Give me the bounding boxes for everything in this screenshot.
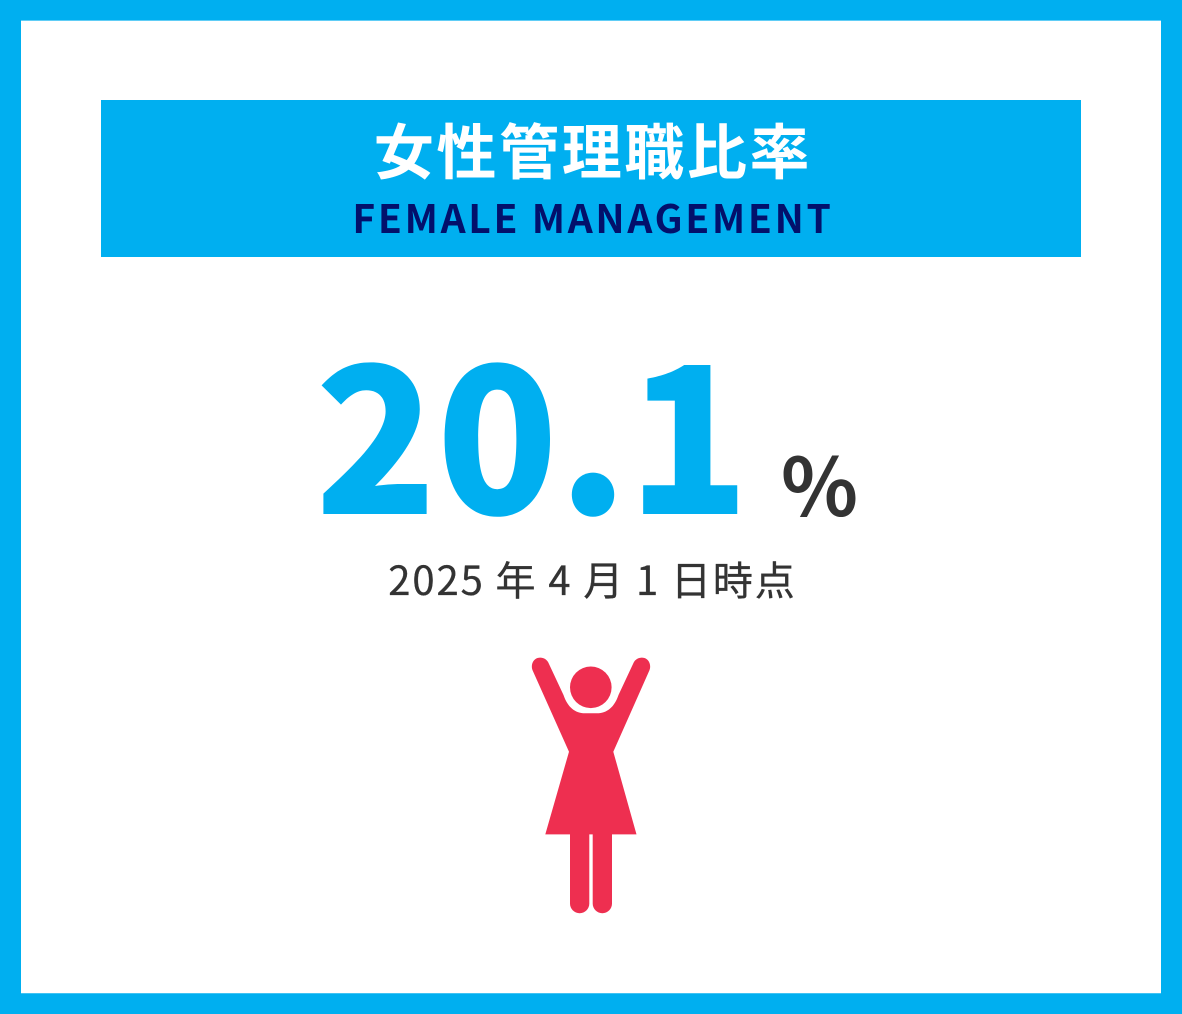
heading banner — [101, 100, 1081, 257]
icon body, arms and skirt — [532, 658, 650, 834]
date note: 2025 年 4 月 1 日時点 — [388, 549, 797, 607]
percent sign: % — [781, 424, 858, 540]
heading: Japanese title: 女性管理職比率 — [374, 105, 812, 192]
big number: 20.1 — [315, 282, 749, 572]
statistic: 20.1 percent — [315, 282, 858, 572]
icon left leg — [570, 833, 589, 913]
heading: English subtitle: FEMALE MANAGEMENT — [352, 189, 834, 245]
icon head — [570, 666, 612, 708]
icon right leg — [593, 833, 612, 913]
icon: woman with raised arms — [532, 658, 650, 914]
